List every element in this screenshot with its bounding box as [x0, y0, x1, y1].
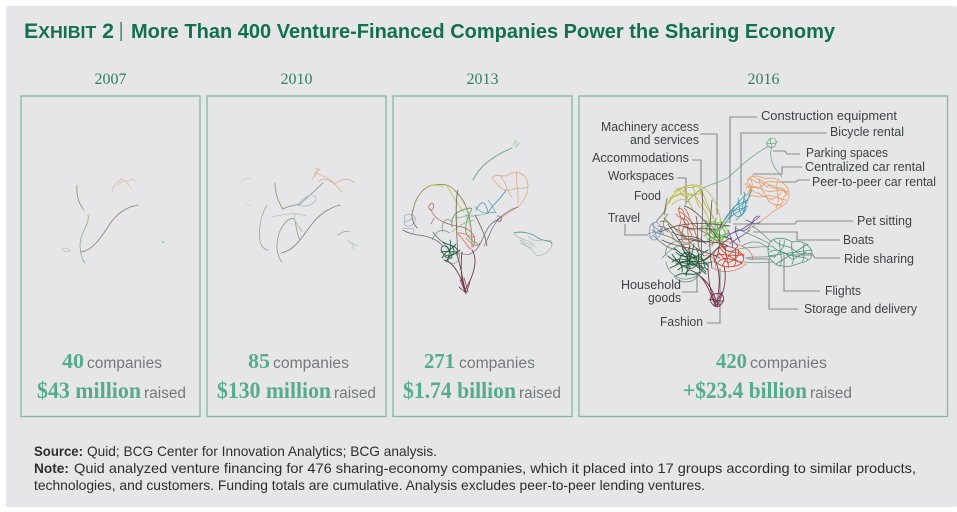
stat: 420 companies: companies [750, 355, 827, 372]
category labels: Pet sitting [857, 213, 912, 228]
stat: 271 companies: 271 [424, 349, 455, 373]
cluster: green centre [704, 218, 730, 246]
network map 2007 [62, 178, 164, 263]
title: EXHIBIT 2 [24, 20, 114, 43]
title: More Than 400 Venture-Financed Companies Power the Sharing Economy [131, 20, 836, 43]
stat: 85 companies: 85 [248, 349, 270, 373]
category labels: Boats [843, 232, 874, 247]
year label 2016: 2016 [748, 71, 780, 88]
category labels: Fashion [660, 314, 703, 329]
network map 2016 [648, 138, 812, 307]
network map 2013 [403, 140, 552, 294]
stat: $43 million raised: raised [144, 385, 186, 402]
long cross-links [728, 226, 775, 263]
cluster: red-orange workspaces [676, 206, 722, 250]
category labels: Centralized car rental [805, 159, 925, 174]
cluster: food / travel [652, 208, 702, 258]
cluster: orange car rental [744, 175, 789, 230]
cluster: household goods [668, 244, 712, 276]
category labels: Food [634, 188, 661, 203]
panel: 2007 [21, 71, 200, 416]
category labels: Travel [608, 210, 640, 225]
cluster: purple pet sitting [724, 216, 760, 248]
stat: 271 companies [424, 349, 535, 373]
category labels: Workspaces [608, 168, 674, 183]
year label 2013: 2013 [466, 71, 498, 88]
stat: 271 companies: companies [459, 355, 535, 372]
category labels: and services [630, 132, 699, 147]
category labels: Construction equipment [761, 108, 897, 123]
cluster: red boats [714, 246, 744, 268]
panel: 2016 [579, 71, 948, 416]
stat: +$23.4 billion raised: raised [810, 385, 852, 402]
category labels: Machinery access [601, 119, 699, 134]
stat: 40 companies [62, 349, 162, 373]
stat: $1.74 billion raised: raised [519, 385, 561, 402]
category labels: Household [621, 277, 681, 292]
category labels: Peer-to-peer car rental [812, 174, 936, 189]
cluster: teal ride sharing [768, 238, 812, 267]
cluster: fashion [690, 262, 725, 306]
category labels: Bicycle rental [830, 124, 904, 139]
stat: +$23.4 billion raised: +$23.4 billion [683, 378, 807, 403]
source and note: Quid analyzed venture financing for 476 sharing-economy companies, which it placed into 17 groups according to similar products, [74, 461, 916, 476]
source and note: technologies, and customers. Funding totals are cumulative. Analysis excludes peer-to-peer lending ventures. [34, 478, 705, 493]
stat: 85 companies: companies [273, 355, 349, 372]
stat: $43 million raised: $43 million [37, 378, 141, 403]
cluster: yellow accommodations [665, 184, 722, 230]
source and note: Note: [34, 461, 69, 476]
category labels: Parking spaces [806, 145, 888, 160]
category labels: Storage and delivery [804, 301, 918, 316]
stat: $130 million raised: $130 million [217, 378, 331, 403]
category labels: goods [648, 290, 681, 305]
category labels: Ride sharing [844, 251, 914, 266]
source and note: Source: [34, 444, 83, 459]
category labels: Flights [825, 283, 861, 298]
year label 2010: 2010 [280, 71, 312, 88]
stat: 40 companies: 40 [62, 349, 84, 373]
stat: 420 companies: 420 [716, 349, 747, 373]
leader lines [625, 117, 853, 323]
category labels: Accommodations [592, 150, 689, 165]
network map 2010 [241, 168, 358, 262]
panel: 2013 [393, 71, 572, 416]
category labels [592, 108, 936, 329]
cluster: parking spaces [685, 138, 782, 205]
cluster: bicycle teal [716, 190, 752, 230]
source and note [34, 444, 916, 493]
stat: $1.74 billion raised: $1.74 billion [403, 378, 516, 403]
panel: 2010 [207, 71, 386, 416]
source and note: Quid; BCG Center for Innovation Analytics; BCG analysis. [87, 444, 437, 459]
stat: 420 companies [716, 349, 827, 373]
year label 2007: 2007 [94, 71, 126, 88]
stat: $130 million raised: raised [334, 385, 376, 402]
stat: 85 companies [248, 349, 349, 373]
stat: 40 companies: companies [87, 355, 162, 372]
